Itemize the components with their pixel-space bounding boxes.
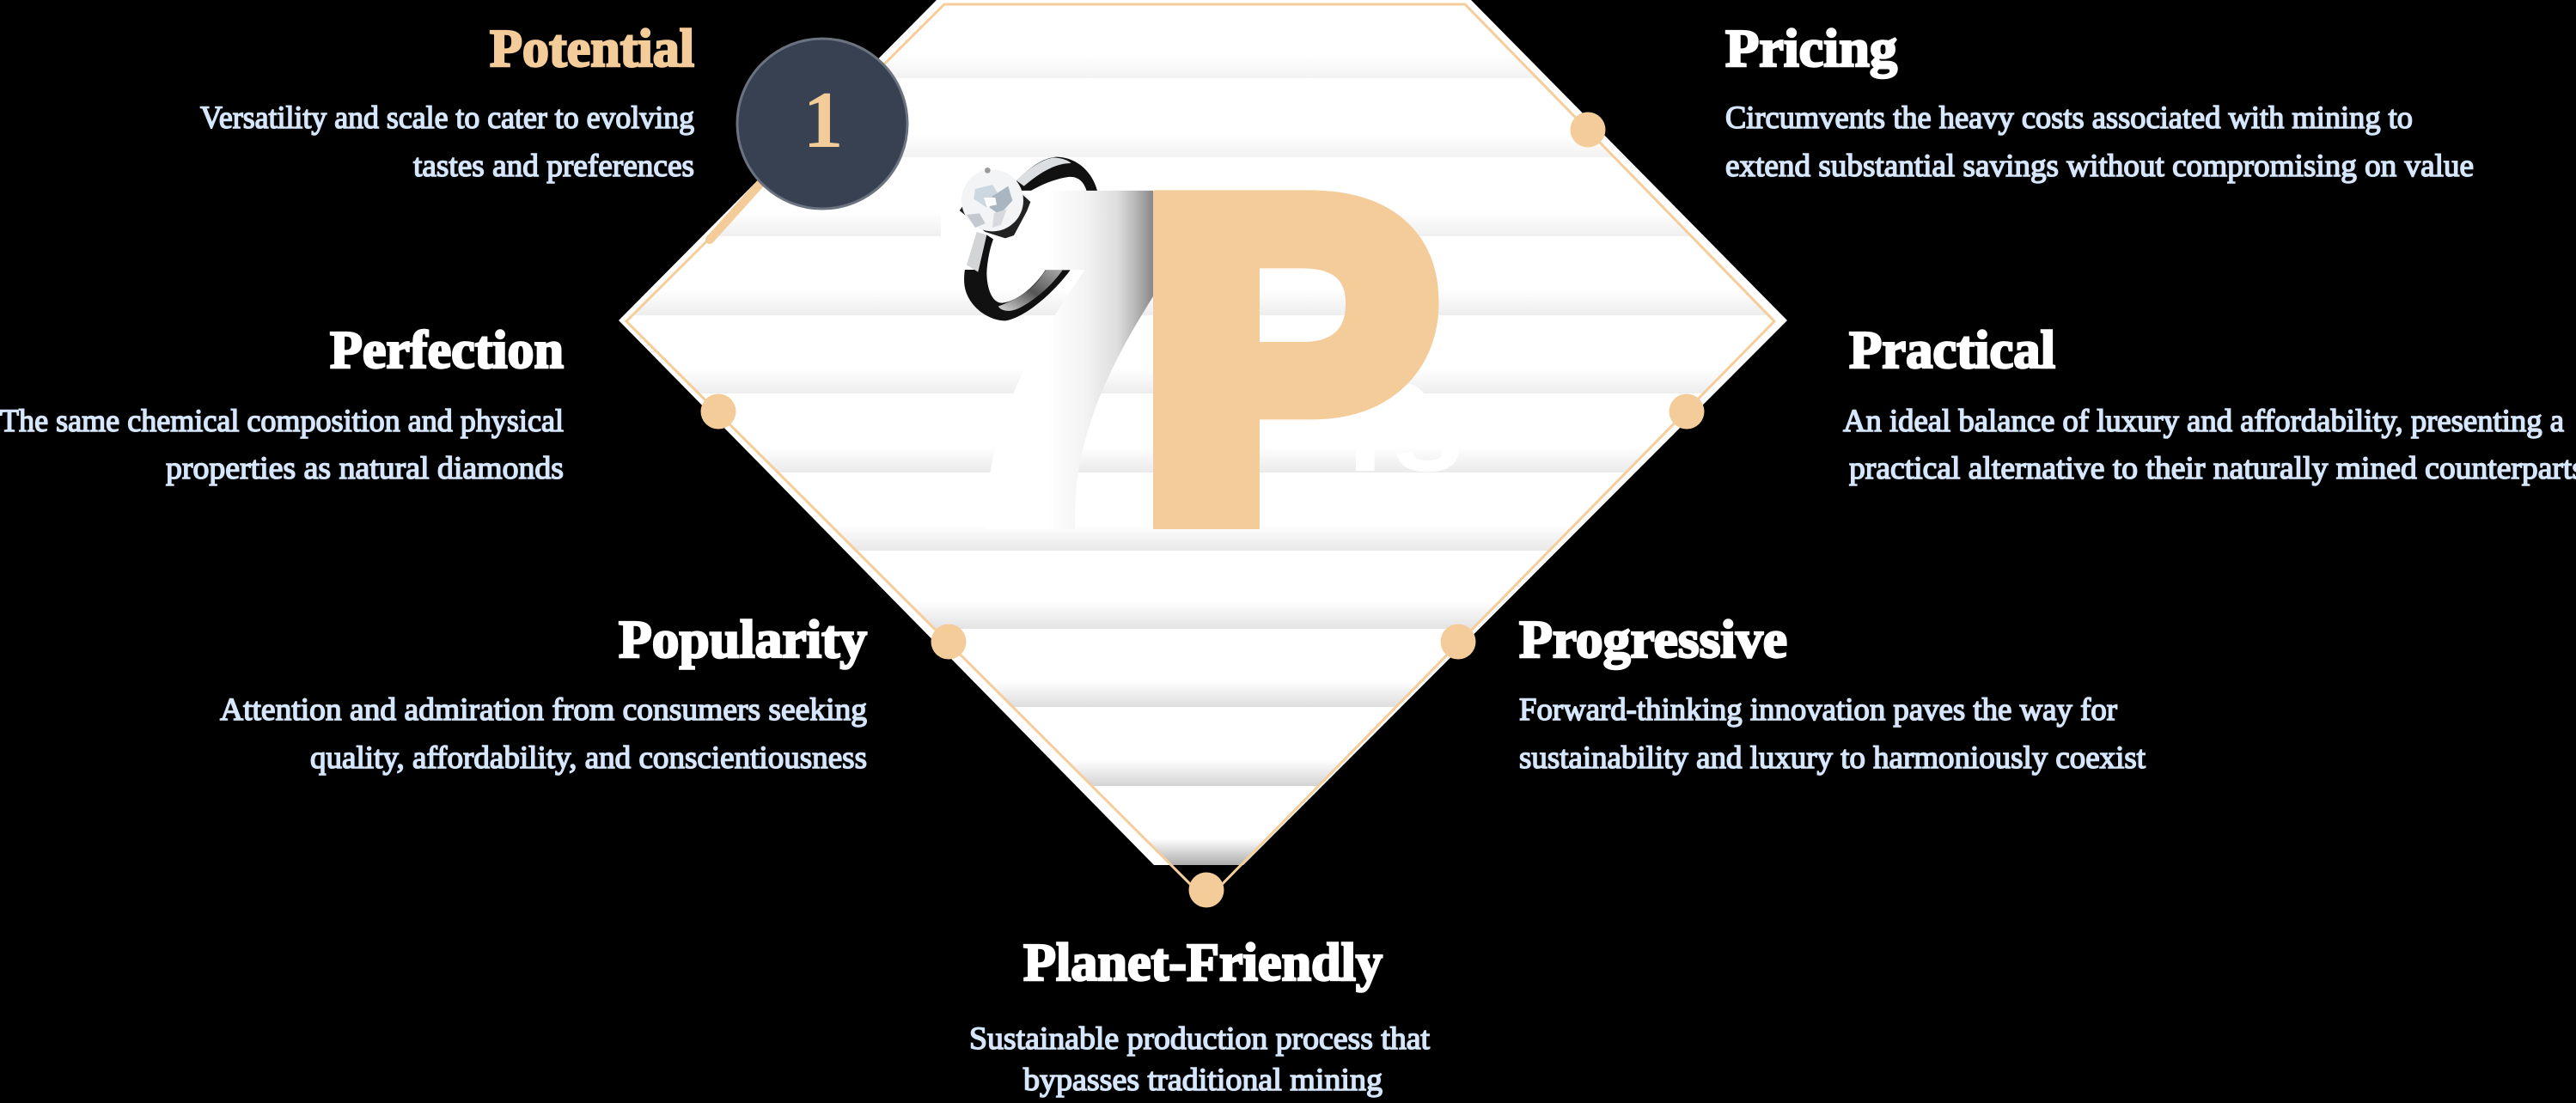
text block: Progressive: sustainability and luxury to harmoniously coexist [1519,740,2146,776]
small white Ps: Ps [1347,354,1464,498]
text block: Planet-Friendly: bypasses traditional mining [1023,1063,1383,1098]
active connector arrow [710,179,765,240]
text block: Progressive [1519,611,2146,776]
text block: Practical [1843,321,2576,486]
text block: Planet-Friendly: Sustainable production process that [969,1021,1431,1057]
text block: Popularity: quality, affordability, and conscientiousness [310,740,867,776]
panel: diamond background [601,0,1804,865]
icon: ring band behind the seven [964,157,1097,320]
text block: Perfection: The same chemical composition and physical [0,404,564,439]
diamond outline [626,4,1774,900]
text block: Practical: Practical [1849,321,2055,380]
text block: Planet-Friendly: Planet-Friendly [1023,934,1383,992]
text block: Potential: Potential [490,20,694,78]
text block: Perfection: properties as natural diamonds [166,451,564,486]
text block: Planet-Friendly [969,934,1431,1098]
text block: Popularity: Attention and admiration from consumers seeking [220,692,867,728]
number badge [737,39,907,209]
numeral seven with shadow: 7 [932,103,1188,616]
text block: Popularity [220,611,867,776]
text block: Perfection [0,321,564,486]
text block: Pricing: Pricing [1725,20,1897,78]
text block: Progressive: Progressive [1519,611,1787,669]
text block: Practical: An ideal balance of luxury and affordability, presenting a [1843,404,2564,439]
large letter P: P [1138,106,1441,612]
text block: Potential: Versatility and scale to cater to evolving [200,101,694,136]
text block: Progressive: Forward-thinking innovation paves the way for [1519,692,2117,728]
text block: Potential [200,20,694,184]
number badge: 1 [803,76,844,165]
text block: Pricing: Circumvents the heavy costs associated with mining to [1725,101,2413,136]
text block: Pricing [1725,20,2474,184]
text block: Potential: tastes and preferences [413,149,694,184]
text block: Pricing: extend substantial savings without compromising on value [1725,149,2474,184]
text block: Practical: practical alternative to their naturally mined counterparts [1849,451,2576,486]
text block: Perfection: Perfection [330,321,564,380]
icon: ring head with diamond [960,168,1030,272]
connector dots [701,112,1705,907]
text block: Popularity: Popularity [619,611,867,669]
